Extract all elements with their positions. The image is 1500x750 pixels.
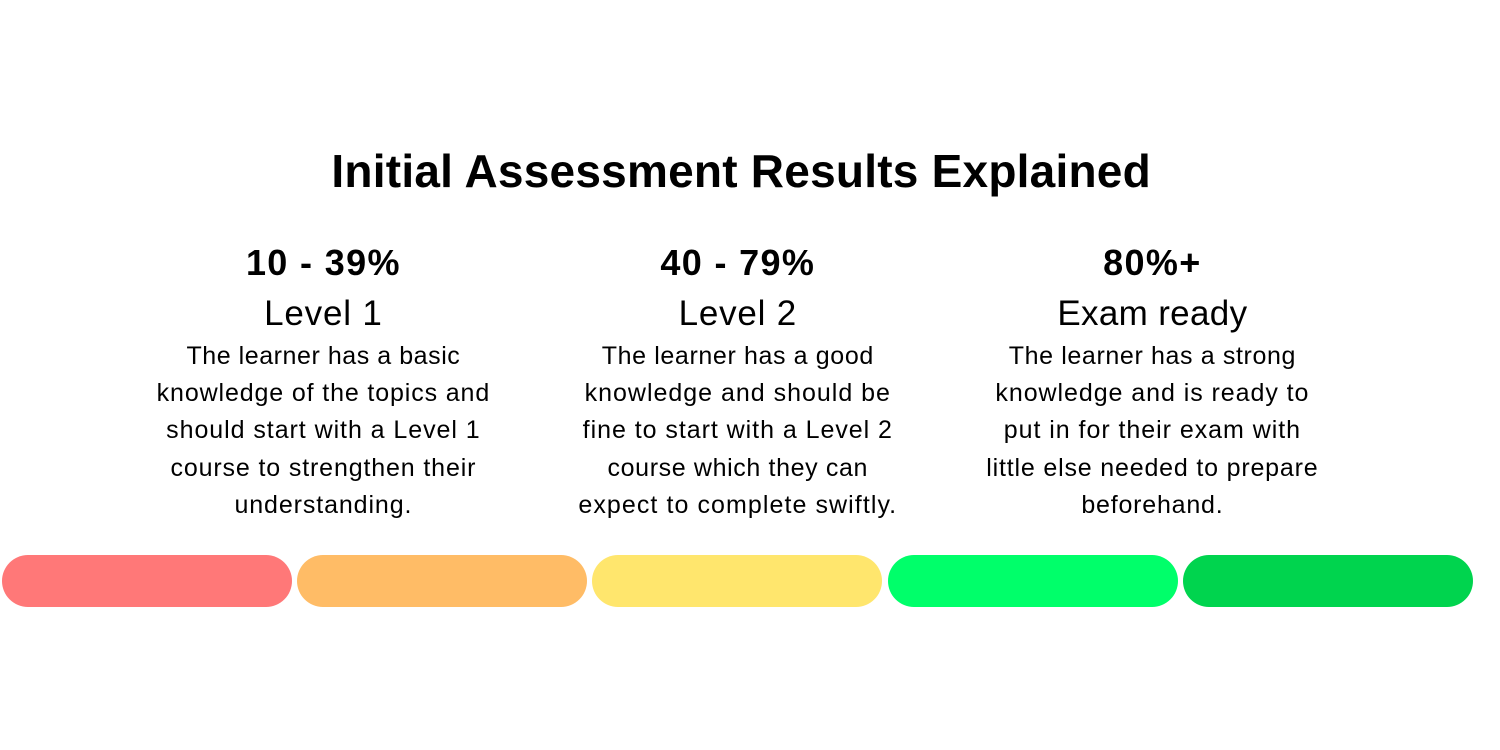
description: Level 1: The learner has a basic [186,342,460,370]
panel: exam ready [986,242,1318,519]
range heading: 40 - 79%: 40 - 79% [660,242,815,283]
description: Level 1: should start with a Level 1 [166,416,481,444]
description: Exam ready [986,342,1318,519]
description: Exam ready: put in for their exam with [1004,416,1301,444]
description: Level 1: understanding. [234,491,412,519]
level name: Level 2: Level 2 [679,294,797,333]
description: Level 2: knowledge and should be [585,379,891,407]
description: Level 1: course to strengthen their [170,454,476,482]
range heading: 80%+: 80%+ [1103,242,1202,283]
level name: Level 1: Level 1 [264,294,383,333]
description: Level 2: course which they can [608,454,868,482]
description: Exam ready: beforehand. [1081,491,1223,519]
range heading: 10 - 39%: 10 - 39% [246,242,401,283]
segment: dark green [1183,555,1473,607]
description: Level 2: The learner has a good [602,342,874,370]
colour scale bar [2,555,1473,607]
level name: Exam ready: Exam ready [1057,294,1247,333]
panel: level 1 [157,242,490,519]
segment: orange [297,555,587,607]
description: Level 2 [578,342,897,519]
panel: level 2 [578,242,897,519]
description: Level 2: expect to complete swiftly. [578,491,897,519]
description: Exam ready: little else needed to prepare [986,454,1318,482]
description: Level 1: knowledge of the topics and [157,379,490,407]
description: Exam ready: knowledge and is ready to [995,379,1309,407]
segment: red [2,555,292,607]
description: Level 2: fine to start with a Level 2 [583,416,893,444]
title: Initial Assessment Results Explained [331,145,1151,197]
description: Level 1 [157,342,490,519]
segment: bright green [888,555,1178,607]
segment: yellow [592,555,882,607]
description: Exam ready: The learner has a strong [1009,342,1296,370]
